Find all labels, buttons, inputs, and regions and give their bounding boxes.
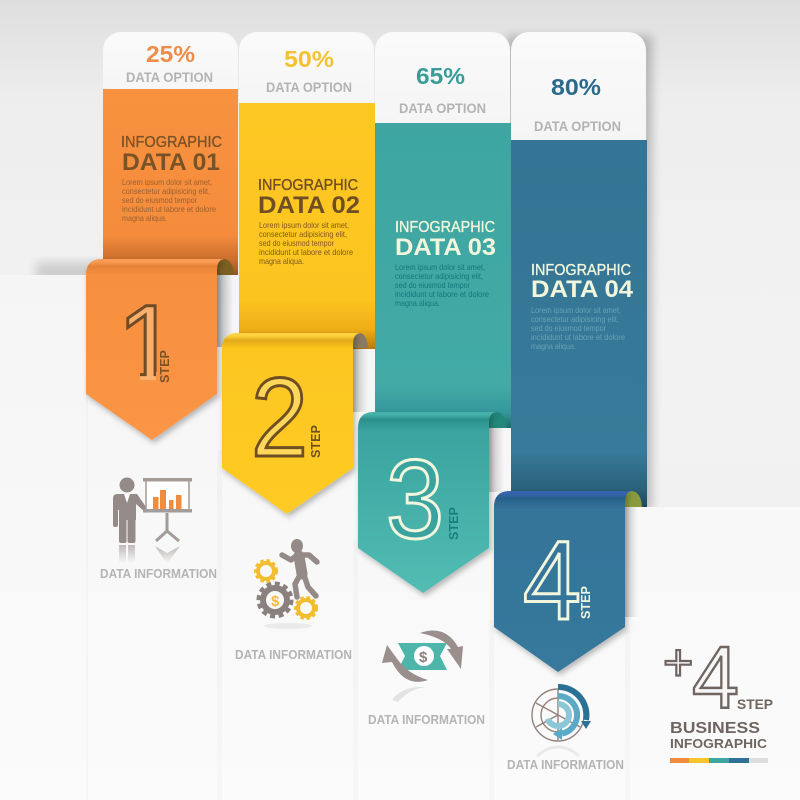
large four: 4 bbox=[692, 628, 739, 727]
heading: INFOGRAPHIC bbox=[395, 219, 495, 236]
panel: data 02 bbox=[239, 32, 375, 349]
body copy: Lorem ipsum dolor sit amet, bbox=[122, 177, 212, 187]
step label: STEP bbox=[578, 586, 593, 619]
fold back bbox=[217, 259, 234, 275]
numeral: 4 bbox=[523, 518, 581, 643]
body copy: consectetur adipisicing elit, bbox=[531, 314, 619, 324]
body copy bbox=[531, 305, 625, 351]
body copy: incididunt ut labore et dolore bbox=[531, 332, 625, 342]
brand block bbox=[663, 628, 773, 763]
ribbon: step 3 bbox=[358, 412, 507, 593]
arc outer head bbox=[581, 721, 591, 729]
ribbon body bbox=[86, 259, 224, 440]
body copy: incididunt ut labore et dolore bbox=[259, 247, 353, 257]
tab: 80% bbox=[511, 32, 646, 162]
note centre bbox=[414, 646, 434, 666]
arc inner bbox=[548, 704, 569, 726]
shirt and tie bbox=[124, 494, 130, 503]
head bbox=[291, 539, 303, 553]
rings bbox=[532, 689, 584, 741]
percentage: 50% bbox=[284, 46, 334, 72]
label: data information 2: DATA INFORMATION bbox=[235, 647, 352, 662]
icon: radar chart bbox=[532, 687, 591, 756]
step label: STEP bbox=[308, 425, 323, 458]
percentage: 25% bbox=[146, 41, 195, 67]
body copy bbox=[395, 262, 489, 308]
lower stepped floor bbox=[0, 275, 800, 800]
data title: DATA 01 bbox=[122, 149, 220, 176]
body copy: magna aliqua. bbox=[395, 298, 440, 308]
pointer bbox=[153, 489, 157, 499]
colour block: orange bbox=[103, 89, 238, 276]
colour block: teal bbox=[375, 123, 511, 428]
body copy: magna aliqua. bbox=[531, 341, 576, 351]
data title: DATA 04 bbox=[531, 276, 634, 303]
body copy: consectetur adipisicing elit, bbox=[259, 229, 347, 239]
numeral: 3 bbox=[386, 437, 444, 562]
icon: running man on gears bbox=[256, 539, 317, 629]
reflection bbox=[264, 623, 312, 629]
label: data information 1: DATA INFORMATION bbox=[100, 566, 217, 581]
body copy: magna aliqua. bbox=[259, 256, 304, 266]
arrow top bbox=[420, 630, 463, 669]
step: STEP bbox=[737, 696, 773, 712]
ribbon body bbox=[494, 491, 632, 672]
person bbox=[113, 478, 155, 543]
colour block: yellow bbox=[239, 103, 375, 349]
banknote bbox=[398, 643, 447, 670]
body copy: sed do eiusmod tempor bbox=[122, 195, 197, 205]
ribbon: step 1 bbox=[86, 259, 234, 440]
ribbon: step 2 bbox=[222, 333, 368, 514]
body copy bbox=[259, 220, 353, 266]
numeral: 1 bbox=[117, 282, 179, 407]
board bbox=[143, 478, 192, 541]
tab: 65% bbox=[375, 32, 510, 142]
panel: data 03 bbox=[375, 32, 511, 428]
tab: 50% bbox=[239, 32, 374, 122]
reflection bbox=[537, 747, 579, 756]
body copy: sed do eiusmod tempor bbox=[531, 323, 606, 333]
percentage: 80% bbox=[551, 74, 601, 100]
body copy: magna aliqua. bbox=[122, 213, 167, 223]
body copy: Lorem ipsum dolor sit amet, bbox=[531, 305, 621, 315]
fold back bbox=[489, 412, 507, 428]
option label: DATA OPTION bbox=[534, 118, 621, 134]
label: data information 3: DATA INFORMATION bbox=[368, 712, 485, 727]
infographic: INFOGRAPHIC bbox=[670, 736, 768, 751]
fold back bbox=[353, 333, 368, 348]
business: BUSINESS bbox=[670, 720, 760, 737]
tab shadow bbox=[506, 36, 652, 511]
percentage: 65% bbox=[416, 63, 465, 89]
body copy: incididunt ut labore et dolore bbox=[122, 204, 216, 214]
data title: DATA 03 bbox=[395, 234, 496, 261]
body copy bbox=[122, 177, 216, 223]
step shadow left bbox=[36, 262, 106, 288]
arc outer bbox=[558, 687, 586, 720]
body copy: consectetur adipisicing elit, bbox=[122, 186, 210, 196]
colour bar bbox=[670, 758, 768, 763]
column shades bbox=[86, 275, 638, 800]
option label: DATA OPTION bbox=[126, 69, 213, 85]
body copy: consectetur adipisicing elit, bbox=[395, 271, 483, 281]
body copy: sed do eiusmod tempor bbox=[259, 238, 334, 248]
panel: data 01 bbox=[103, 32, 238, 276]
gear right bbox=[296, 598, 316, 618]
body copy: Lorem ipsum dolor sit amet, bbox=[395, 262, 485, 272]
step label: STEP bbox=[157, 350, 172, 383]
numeral: 2 bbox=[251, 355, 308, 480]
ribbon body bbox=[222, 333, 360, 514]
colour block: blue bbox=[511, 140, 647, 508]
step label: STEP bbox=[446, 507, 461, 540]
ribbon body bbox=[358, 412, 496, 593]
dollar: $ bbox=[271, 593, 280, 610]
option label: DATA OPTION bbox=[399, 100, 486, 116]
arc middle head bbox=[553, 728, 562, 740]
arc middle bbox=[558, 696, 577, 734]
body copy: Lorem ipsum dolor sit amet, bbox=[259, 220, 349, 230]
tab: 25% bbox=[103, 32, 238, 112]
reflection bbox=[119, 545, 180, 564]
heading: INFOGRAPHIC bbox=[121, 134, 222, 151]
plus sign: + bbox=[663, 634, 693, 692]
arrow bottom bbox=[382, 645, 428, 682]
icon: money exchange bbox=[382, 630, 463, 702]
fold back bbox=[625, 491, 642, 507]
label: data information 4: DATA INFORMATION bbox=[507, 757, 624, 772]
body copy: incididunt ut labore et dolore bbox=[395, 289, 489, 299]
panel: data 04 bbox=[506, 32, 652, 511]
icon: presenter with chart board bbox=[113, 478, 192, 564]
ribbon: step 4 bbox=[494, 491, 642, 672]
body copy: sed do eiusmod tempor bbox=[395, 280, 470, 290]
dollar: $ bbox=[419, 649, 428, 666]
bars bbox=[153, 490, 182, 509]
data title: DATA 02 bbox=[258, 192, 360, 219]
gear top bbox=[256, 560, 276, 582]
gear large bbox=[258, 584, 292, 616]
heading: INFOGRAPHIC bbox=[258, 177, 358, 194]
option label: DATA OPTION bbox=[266, 79, 352, 95]
person bbox=[282, 555, 317, 597]
reflection bbox=[392, 687, 425, 702]
heading: INFOGRAPHIC bbox=[531, 262, 631, 279]
